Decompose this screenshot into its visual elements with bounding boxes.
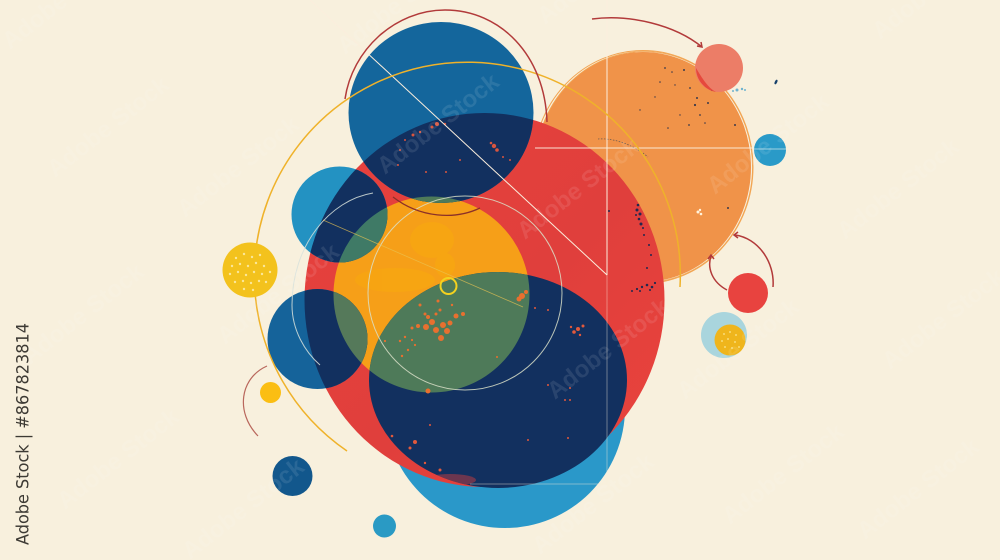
orange splatter on green [384,290,528,394]
dark arc under top circle [393,197,480,215]
texture on yellow left circle [229,253,271,291]
green overlap of navy and yellow [370,272,530,392]
pale blue circle [701,312,747,358]
large orange circle [533,50,753,284]
watermark pattern: Adobe Stock [527,448,660,560]
navy left circle [268,289,368,389]
light blue bottom circle [385,288,625,528]
navy lower ellipse [369,272,627,488]
yellow-orange circle [334,196,530,392]
watermark pattern: Adobe Stock [672,293,805,405]
watermark pattern: Adobe Stock [42,71,175,183]
coral circle [695,44,743,92]
vertical stock credit: Adobe Stock | #867823814 [14,323,34,545]
watermark pattern: Adobe Stock [172,111,305,223]
watermark pattern: Adobe Stock [372,68,505,180]
line across blue circle [754,148,786,150]
watermark pattern: Adobe Stock [542,293,675,405]
small yellow ring [440,278,456,294]
orange splatter on navy [391,307,584,472]
thin yellow line [323,220,523,307]
blue splash by coral [732,88,746,92]
watermark pattern: Adobe Stock [702,88,835,200]
yellow textured circle left [222,242,278,298]
watermark pattern: Adobe Stock [52,403,185,515]
small yellow circle [260,382,281,403]
lighter patches on yellow circle [355,222,455,292]
small teal circle [373,514,396,538]
curved arrow lower right [734,232,773,287]
red small circle [728,273,768,313]
big red circle [304,113,664,487]
teal left circle [292,166,388,262]
small left arc [243,366,267,436]
watermark pattern: Adobe Stock [717,418,850,530]
watermark pattern: Adobe Stock [832,133,965,245]
white guide lines [310,0,752,484]
watermark pattern: Adobe Stock [852,433,985,545]
overlaps of navy left circle [304,289,368,388]
watermark pattern: Adobe Stock [512,133,645,245]
tiny navy mark [774,79,778,85]
red smudge at bottom of navy [436,474,476,484]
small navy circle [272,456,312,496]
coral overlap on orange [696,68,716,92]
big yellow arc [254,62,680,451]
watermark pattern: Adobe Stock [212,238,345,350]
overlaps of teal circle [310,169,388,262]
abstract circle composition [16,9,786,545]
watermark pattern: Adobe Stock [17,258,150,370]
red arc around top circle [345,10,547,122]
top blue circle [348,22,534,203]
orange splatter on top navy [397,122,511,173]
arrow top right [592,18,702,47]
blue small circle right [754,134,786,166]
texture on yellow dotted circle [721,331,740,349]
dark specks on red circle [608,204,656,292]
thin white arc on left circles [292,193,373,365]
thin white circle [368,196,562,390]
yellow dotted circle right [714,324,746,356]
curved arrow lower left [708,255,727,290]
navy overlap of top blue and red [363,113,534,203]
